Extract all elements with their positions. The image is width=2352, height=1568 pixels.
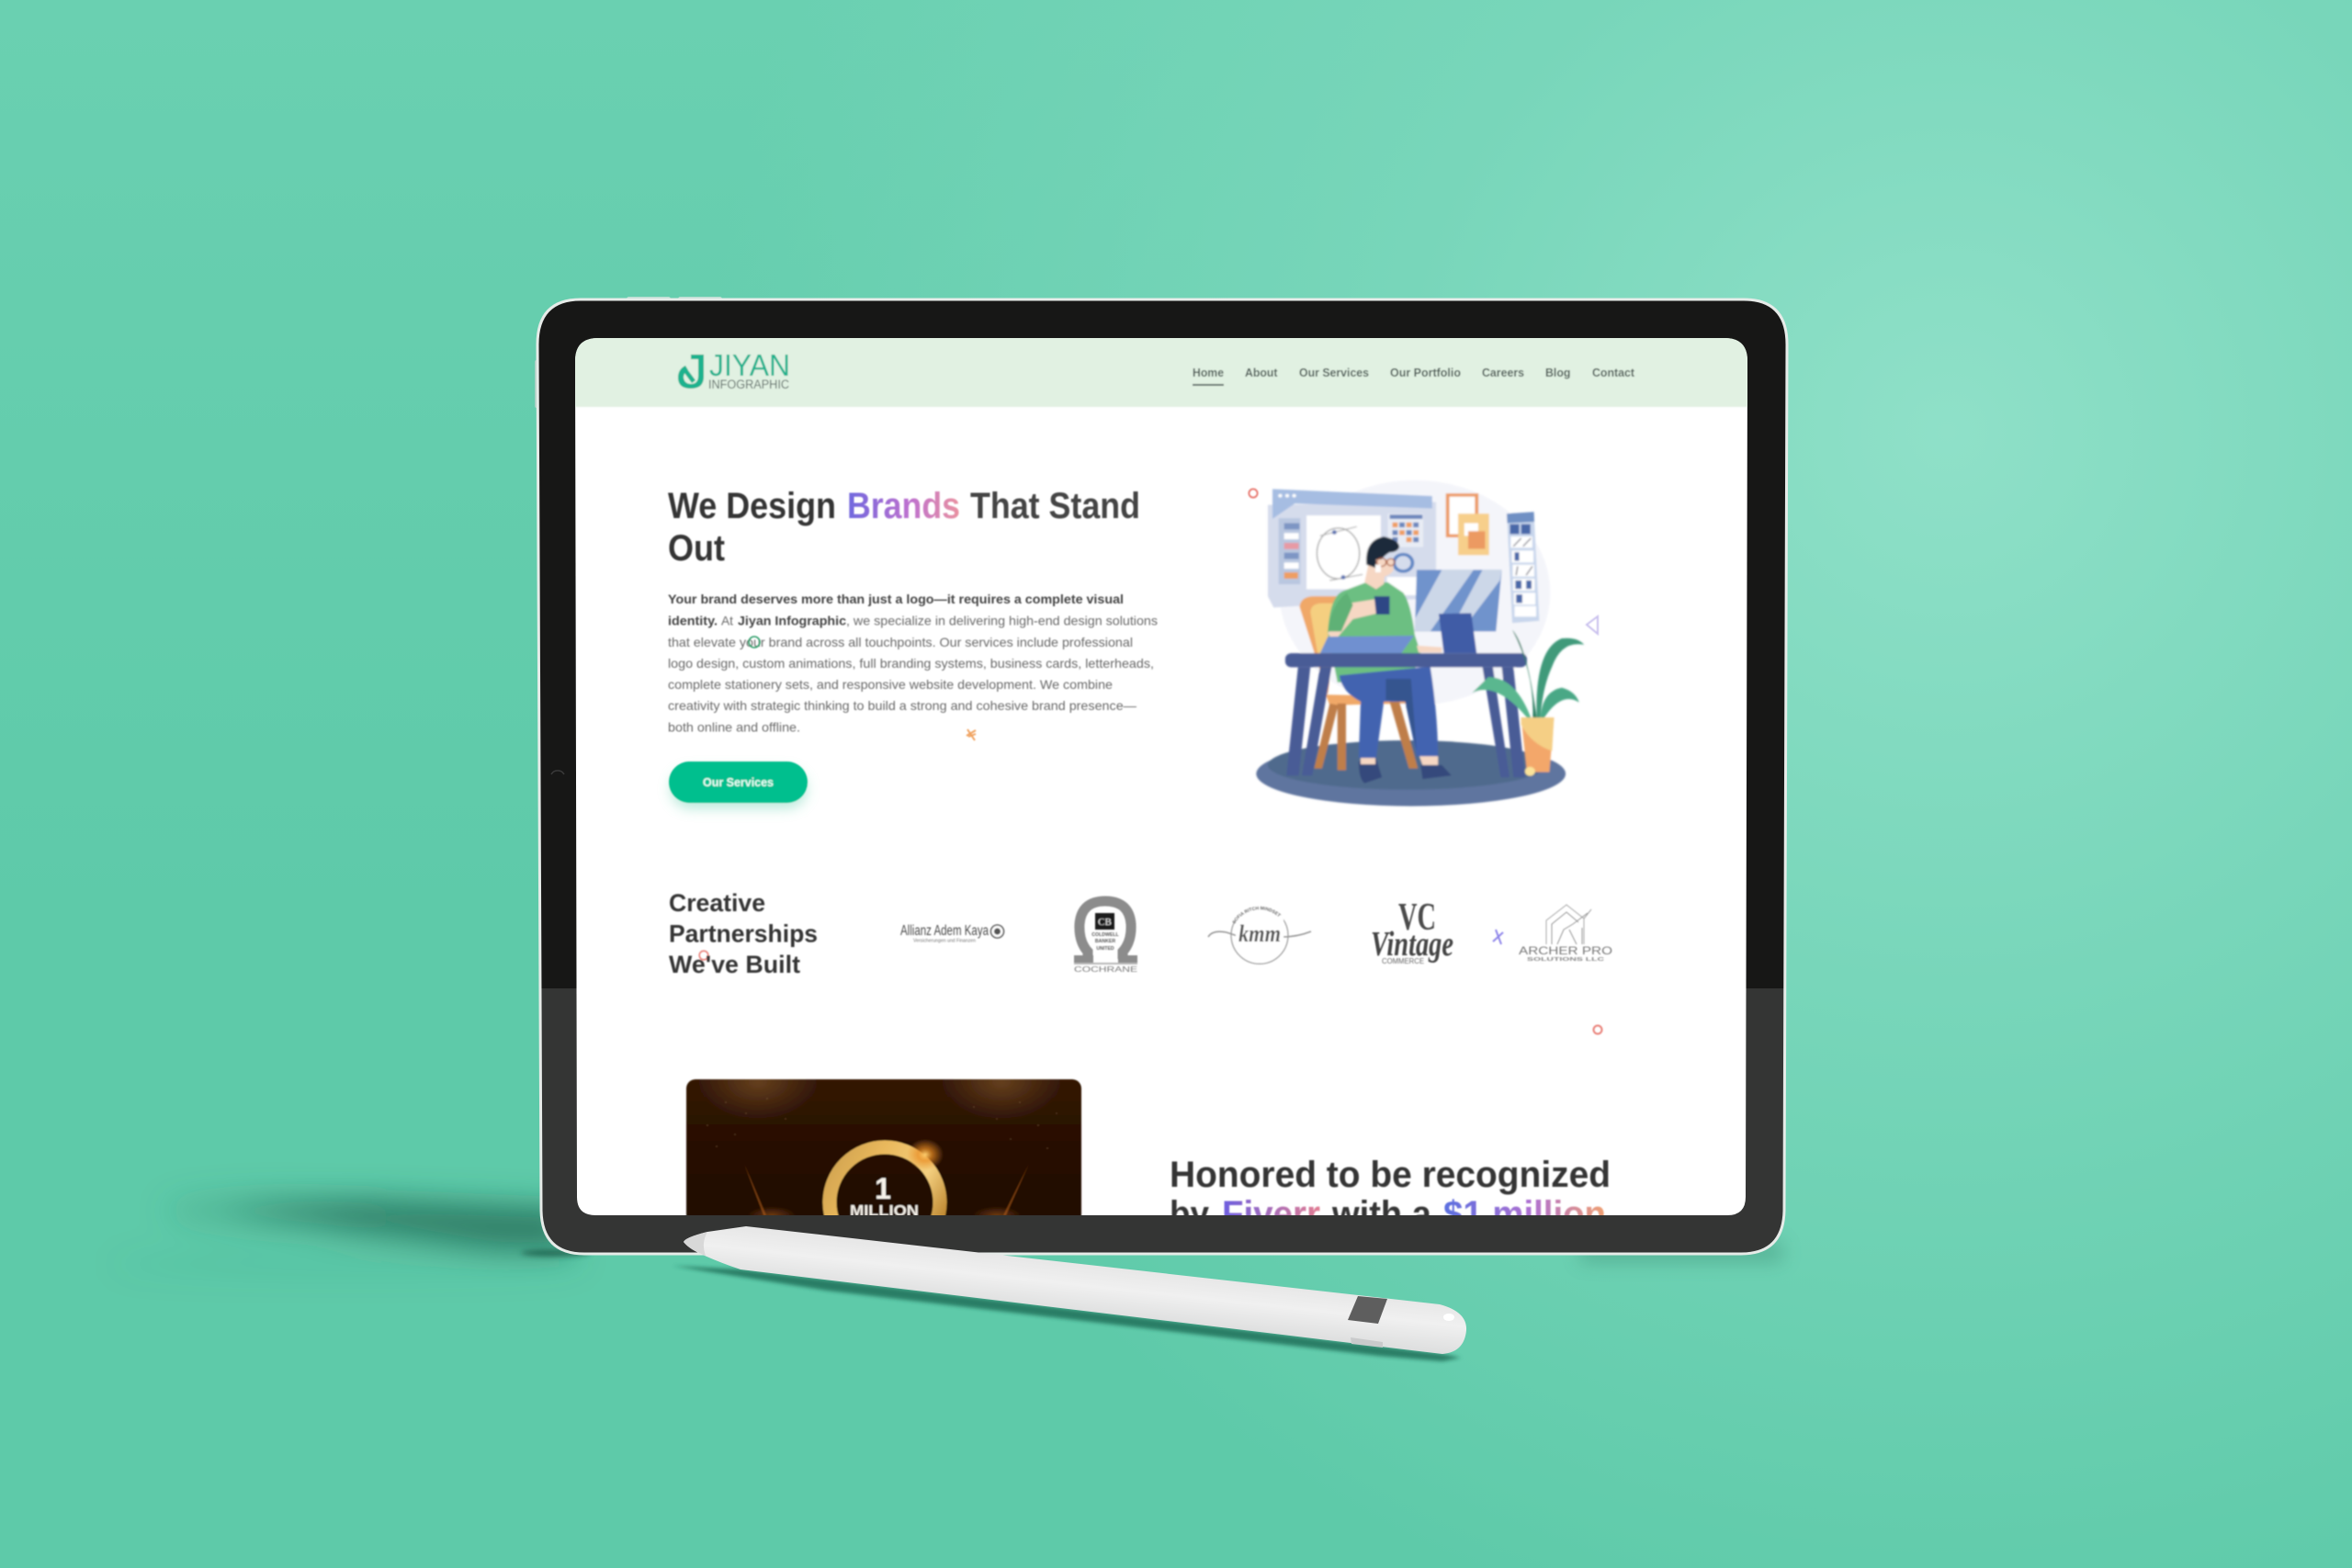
desk <box>1285 653 1527 777</box>
button: Our Services <box>669 761 808 808</box>
logo: VC Vintage Commerce: COMMERCE <box>1382 957 1424 965</box>
button: Our Services: Our Services <box>703 775 774 789</box>
logo: Archer Pro Solutions <box>1519 905 1612 963</box>
pencil body <box>684 1226 1466 1354</box>
pencil band <box>1348 1296 1387 1348</box>
potted plant <box>1472 629 1584 776</box>
decorative floating shapes <box>699 489 1602 1034</box>
floating art frames <box>1448 495 1489 555</box>
tool panel <box>1507 512 1539 623</box>
hero body text: Jiyan Infographic <box>738 614 846 628</box>
pencil tip <box>684 1232 707 1256</box>
logo: Allianz Adem Kaya: Allianz Adem Kaya <box>900 923 989 939</box>
recognition heading: Fiverr <box>1222 1194 1320 1235</box>
partnerships heading: We've Built <box>669 951 800 978</box>
design software window <box>1268 489 1436 607</box>
hero body text: At <box>721 614 733 628</box>
hero body text: , we specialize in delivering high-end design solutions <box>846 614 1158 628</box>
award card: 1 million <box>686 1043 1081 1258</box>
hero body text: that elevate your brand across all touchpoints. Our services include professional <box>668 636 1133 649</box>
hero body text: Your brand deserves more than just a logo—it requires a complete visual <box>668 592 1124 606</box>
light rays <box>744 1164 1029 1224</box>
pencil cap highlight <box>1443 1314 1454 1321</box>
navigation links: Our Portfolio <box>1390 367 1461 379</box>
panel: tablet screen <box>575 338 1747 1215</box>
logo: Coldwell Banker Cochrane: COCHRANE <box>1074 965 1137 974</box>
recognition heading: Honored to be recognized <box>1170 1155 1611 1195</box>
navigation links: Our Services <box>1299 367 1369 379</box>
logo: VC Vintage Commerce: VC <box>1398 897 1436 939</box>
website content <box>575 338 1747 1215</box>
logo: Coldwell Banker Cochrane: BANKER <box>1095 939 1115 944</box>
floor ellipse <box>1256 740 1566 807</box>
hero heading: We Design <box>668 486 836 526</box>
navigation links <box>1193 367 1635 386</box>
illustration: designer at desk <box>1256 480 1584 807</box>
recognition heading <box>1170 1155 1611 1235</box>
hero body text: logo design, custom animations, full branding systems, business cards, letterheads, <box>668 657 1154 671</box>
pencil shadow <box>673 1266 1461 1361</box>
hero body text: both online and offline. <box>668 720 800 735</box>
logo: VC Vintage Commerce: Vintage <box>1371 925 1453 964</box>
hero body text: complete stationery sets, and responsive website development. We combine <box>668 678 1113 692</box>
logo: Allianz Adem Kaya <box>900 923 1003 944</box>
partnerships heading: Creative <box>669 889 765 917</box>
panel: navigation header <box>575 338 1747 408</box>
logo: Jiyan Infographic <box>677 354 789 389</box>
recognition heading: $1 million <box>1443 1194 1606 1235</box>
hero heading <box>667 491 1139 562</box>
chair <box>1299 596 1418 771</box>
navigation links: Blog <box>1545 367 1571 379</box>
tablet top hardware buttons <box>535 297 722 408</box>
logo: Coldwell Banker Cochrane: UNITED <box>1096 946 1114 952</box>
partnerships heading: Partnerships <box>669 920 818 948</box>
gold ring <box>830 1147 940 1258</box>
award card: 1 million: 1 <box>875 1172 891 1205</box>
logo: kmm script <box>1207 906 1312 965</box>
tablet ground shadow <box>110 1196 1782 1273</box>
logo: Coldwell Banker Cochrane <box>1074 901 1137 974</box>
hero body text <box>668 592 1158 735</box>
hero heading: Brands <box>847 486 960 526</box>
logo: kmm script: kmm <box>1238 920 1281 947</box>
tablet device <box>535 297 1788 1293</box>
hero heading: That Stand <box>970 486 1140 526</box>
navigation links: Careers <box>1482 367 1524 379</box>
logo: Archer Pro Solutions: ARCHER PRO <box>1519 944 1612 957</box>
person: head <box>1364 536 1399 589</box>
logo: kmm script: SOFIA RITCH MINDSET <box>1231 906 1282 924</box>
recognition heading: by <box>1170 1194 1210 1235</box>
hero heading: Out <box>668 528 725 569</box>
logo: Jiyan Infographic: INFOGRAPHIC <box>708 378 789 391</box>
icon: J mark <box>678 355 704 389</box>
laptop screens <box>1415 570 1502 653</box>
navigation links: About <box>1245 367 1278 379</box>
tablet bezel <box>533 294 1792 1259</box>
hero body text: identity. <box>668 614 718 628</box>
sparkle dust <box>707 1098 1057 1149</box>
logo: Coldwell Banker Cochrane: COLDWELL <box>1091 932 1120 938</box>
drawing tablet <box>1320 636 1414 653</box>
award card: 1 million: MILLION <box>850 1201 919 1220</box>
navigation links: Contact <box>1592 367 1635 379</box>
partnerships heading <box>669 889 818 978</box>
logo: Jiyan Infographic: JIYAN <box>709 349 790 383</box>
person: legs <box>1340 667 1452 784</box>
hero body text: creativity with strategic thinking to build a strong and cohesive brand presence— <box>668 699 1136 713</box>
person: torso and arm <box>1328 582 1442 682</box>
logo: Archer Pro Solutions: SOLUTIONS LLC <box>1527 957 1605 963</box>
logo: Allianz Adem Kaya: Versicherungen und Finanzen <box>913 939 976 944</box>
navigation links: Home <box>1193 367 1224 379</box>
logo: Coldwell Banker Cochrane: CB <box>1098 917 1112 928</box>
logo: VC Vintage Commerce <box>1371 897 1453 965</box>
recognition heading: with a <box>1331 1194 1432 1235</box>
background blob <box>1280 480 1550 705</box>
stylus pencil <box>673 1226 1466 1361</box>
